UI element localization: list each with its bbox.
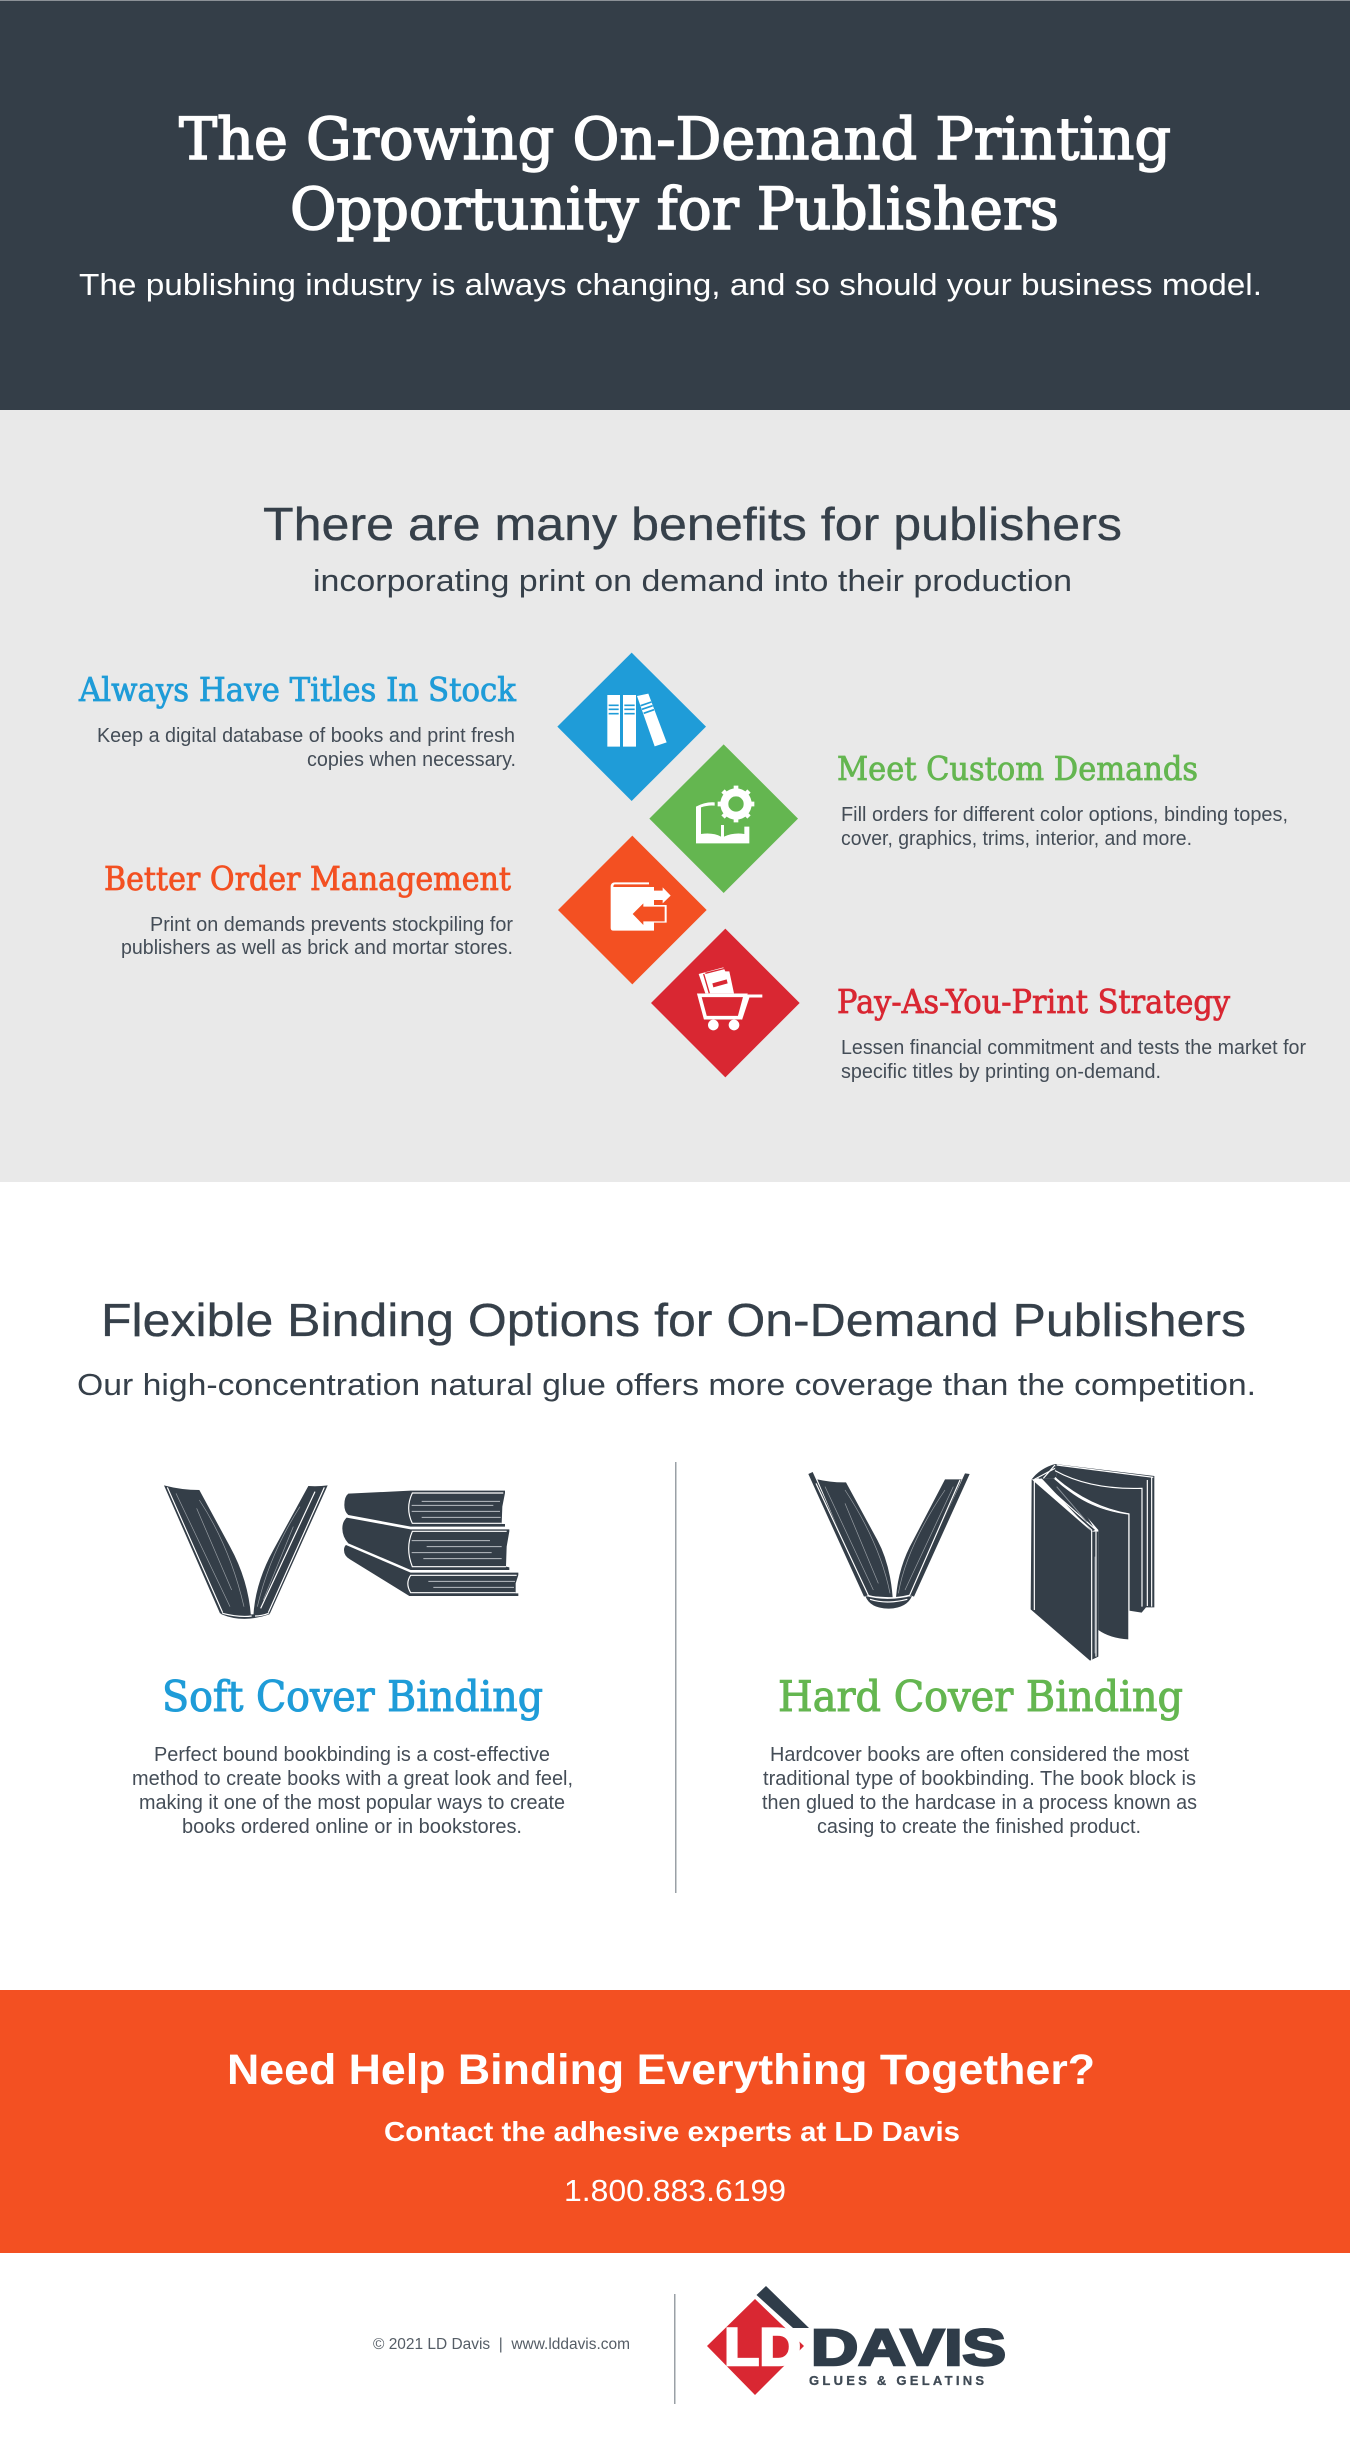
panel: binding options [0,1182,1350,1990]
soft cover description: Perfect bound bookbinding is a cost-effective [154,1744,550,1766]
soft cover description: books ordered online or in bookstores. [182,1816,522,1838]
subtitle: The publishing industry is always changing, and so should your business model. [79,267,1262,302]
benefits heading: There are many benefits for publishers [263,498,1122,550]
benefit: meet custom demands [837,749,1288,850]
benefit: pay-as-you-print strategy: Lessen financial commitment and tests the market for [841,1037,1306,1059]
soft cover heading: Soft Cover Binding [162,1672,543,1721]
icon: soft cover open book [164,1485,328,1619]
binding subheading: Our high-concentration natural glue offers more coverage than the competition. [77,1367,1256,1402]
benefit: meet custom demands: cover, graphics, trims, interior, and more. [841,828,1192,850]
benefits subheading: incorporating print on demand into their production [313,563,1072,598]
panel: benefits [0,410,1350,1182]
benefit: always have titles in stock: Always Have Titles In Stock [78,670,517,709]
footer divider [674,2294,676,2404]
logo: LD Davis: LD [724,2318,801,2377]
hard cover description: Hardcover books are often considered the most [770,1744,1189,1766]
soft cover description: method to create books with a great look and feel, [132,1768,573,1790]
phone number: 1.800.883.6199 [564,2173,786,2208]
benefit: always have titles in stock [78,670,517,771]
title: Opportunity for Publishers [290,175,1059,243]
hard cover heading: Hard Cover Binding [778,1672,1183,1721]
benefit: pay-as-you-print strategy: Pay-As-You-Print Strategy [837,982,1230,1021]
icon: soft cover book stack [342,1491,518,1596]
logo: LD Davis: GLUES & GELATINS [809,2373,984,2388]
hard cover description: then glued to the hardcase in a process known as [762,1792,1197,1814]
panel: footer [0,2253,1350,2444]
benefit: better order management: publishers as well as brick and mortar stores. [121,937,513,959]
icon: hard cover standing book [1031,1464,1154,1661]
benefit: better order management: Print on demands prevents stockpiling for [150,914,513,936]
benefit: pay-as-you-print strategy [837,982,1306,1083]
benefit: pay-as-you-print strategy: specific titles by printing on-demand. [841,1061,1161,1083]
icon: green diamond with book and gear [649,744,798,893]
benefit: always have titles in stock: Keep a digital database of books and print fresh [97,725,515,747]
title: The Growing On-Demand Printing [179,105,1171,173]
soft cover description: making it one of the most popular ways to create [139,1792,565,1814]
logo: LD Davis: DAVIS [811,2319,1006,2376]
hard cover description [762,1744,1197,1838]
soft cover description [132,1744,573,1838]
hard cover description: traditional type of bookbinding. The book block is [763,1768,1196,1790]
icon: orange diamond with book and arrows [558,836,707,984]
icon: red diamond with shopping cart [651,929,800,1077]
title [179,105,1171,243]
divider [675,1462,676,1893]
icon: hard cover open book [808,1472,970,1609]
hard cover description: casing to create the finished product. [817,1816,1141,1838]
logo: LD Davis [707,2286,1006,2395]
binding heading: Flexible Binding Options for On-Demand Publishers [101,1294,1246,1346]
benefit: meet custom demands: Fill orders for different color options, binding topes, [841,804,1288,826]
call to action heading: Need Help Binding Everything Together? [227,2046,1095,2094]
benefit: meet custom demands: Meet Custom Demands [837,749,1198,788]
benefit: better order management: Better Order Management [104,859,511,898]
benefit: better order management [104,859,513,959]
copyright: © 2021 LD Davis | www.lddavis.com [373,2336,630,2353]
panel: header [0,0,1350,410]
panel: call to action [0,1990,1350,2253]
benefit: always have titles in stock: copies when necessary. [307,749,516,771]
icon: blue diamond with books [557,653,706,801]
call to action subheading: Contact the adhesive experts at LD Davis [384,2116,960,2147]
